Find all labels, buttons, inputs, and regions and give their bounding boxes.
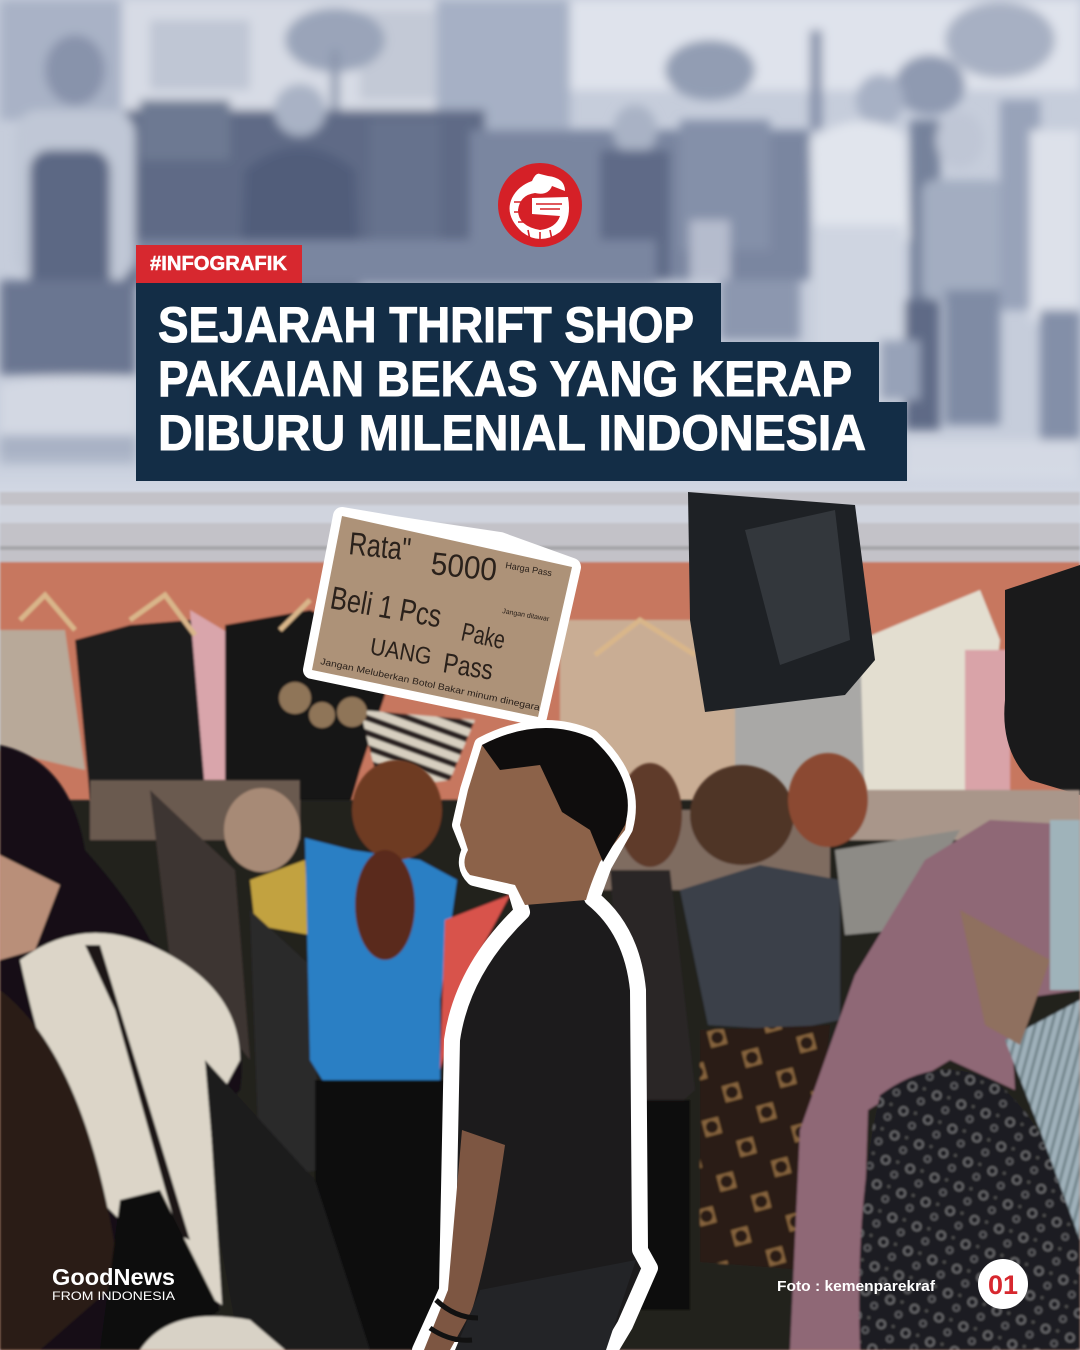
woman in white hoodie left	[0, 745, 242, 1350]
cut-out man in black t-shirt with white outline	[420, 728, 650, 1350]
cut-out sign with handwritten text: Jangan ditawar	[502, 608, 550, 623]
cut-out sign with handwritten text: 5000	[429, 545, 499, 588]
shopper centre right	[618, 763, 682, 867]
cut-out sign with handwritten text: Pake	[459, 617, 508, 655]
cut-out sign with handwritten text: Jangan Meluberkan Botol Bakar minum dinegara	[320, 656, 541, 713]
hanging black bag	[688, 492, 875, 712]
page number badge	[978, 1259, 1028, 1309]
cut-out sign with handwritten text: Rata"	[347, 525, 413, 567]
brand: GoodNews from Indonesia: FROM INDONESIA	[52, 1289, 175, 1303]
title block: DIBURU MILENIAL INDONESIA	[158, 405, 866, 461]
photo credit: Foto : kemenparekraf	[777, 1278, 936, 1295]
cut-out sign with handwritten text: Pass	[441, 647, 495, 686]
black bag at right edge	[1004, 565, 1080, 795]
logo: red circle with white garuda G emblem	[498, 163, 582, 247]
background photo: crowd at the market, blue-grey duotone	[0, 0, 1080, 540]
crowd base	[0, 800, 1080, 1350]
brand: GoodNews from Indonesia: GoodNews	[52, 1264, 175, 1290]
title block: SEJARAH THRIFT SHOP	[158, 297, 694, 353]
page number badge: 01	[988, 1270, 1018, 1300]
hijab woman	[790, 820, 1080, 1350]
brand: GoodNews from Indonesia	[52, 1264, 175, 1303]
title block: PAKAIAN BEKAS YANG KERAP	[158, 351, 852, 407]
cut-out sign with handwritten text: Harga Pass	[505, 560, 553, 578]
woman in blue top	[305, 838, 457, 1092]
cut-out sign with handwritten text: UANG	[368, 633, 434, 671]
bottom photo: clothes rack and shoppers	[0, 492, 1080, 1350]
title block	[136, 283, 907, 481]
tag: #INFOGRAFIK: #INFOGRAFIK	[150, 253, 288, 275]
cut-out sign with handwritten text	[312, 516, 572, 717]
cut-out sign with handwritten text: Beli 1 Pcs	[328, 579, 444, 634]
tag: #INFOGRAFIK	[136, 245, 302, 283]
